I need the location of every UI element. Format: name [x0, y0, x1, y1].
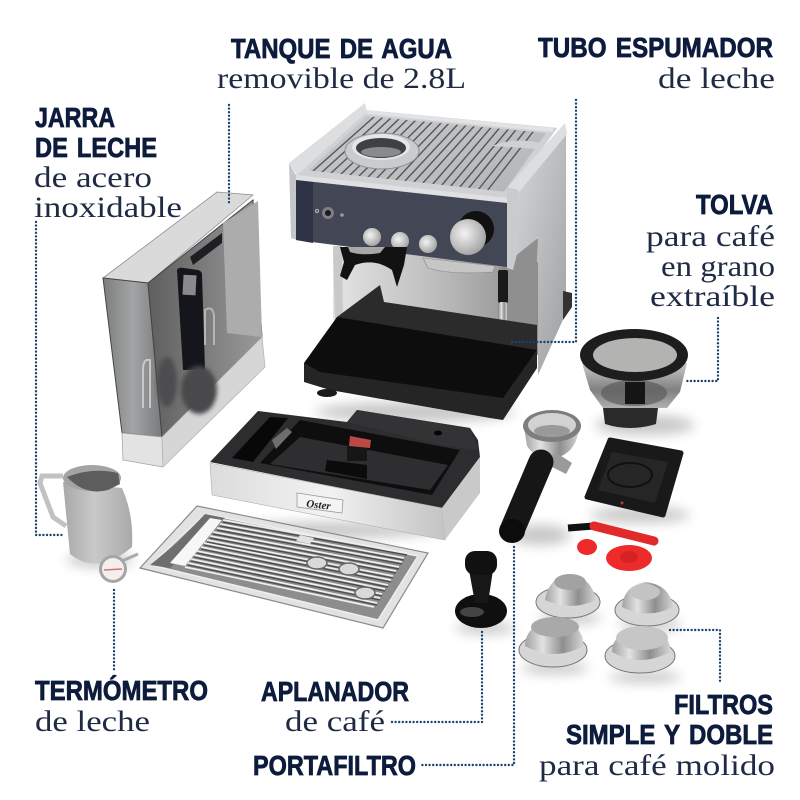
knobs: [363, 211, 494, 255]
label: termómetro: [35, 675, 208, 738]
label: jarra de leche: DE LECHE: [35, 132, 157, 163]
label: jarra de leche: [34, 102, 182, 224]
interior back wall: [333, 247, 538, 355]
drip box base: [210, 410, 480, 540]
bean hopper ring: [345, 133, 419, 169]
brand plate: Oster: [306, 498, 332, 513]
label: aplanador: APLANADOR: [261, 676, 409, 707]
label: aplanador: [261, 676, 409, 738]
label: jarra de leche: JARRA: [35, 102, 115, 133]
red discs: [577, 539, 652, 571]
hopper: [580, 329, 688, 428]
drip grate: [140, 506, 428, 628]
label: filtros: para café molido: [539, 749, 775, 782]
tamper: [455, 551, 507, 628]
label: jarra de leche: de acero: [34, 161, 152, 194]
switch: [316, 207, 344, 219]
cleaning brush: [568, 526, 654, 541]
steam wand: [498, 270, 508, 351]
label: tolva: extraíble: [650, 280, 775, 313]
label: tubo espumador: de leche: [658, 62, 775, 95]
label: filtros: [539, 689, 775, 782]
espresso machine: [289, 103, 572, 420]
label: tolva: TOLVA: [696, 189, 773, 220]
rear tab: [563, 291, 572, 320]
thermometer: [99, 554, 138, 583]
portafilter: [499, 410, 581, 543]
label: tolva: en grano: [661, 250, 775, 283]
label: filtros: FILTROS: [674, 689, 773, 720]
label: portafiltro: PORTAFILTRO: [253, 750, 416, 781]
label: jarra de leche: inoxidable: [34, 191, 182, 224]
red latch and holder: [325, 436, 371, 479]
tank handle and internal parts: [143, 233, 222, 414]
machine top tray: [295, 110, 557, 198]
label: tanque de agua: removible de 2.8L: [217, 62, 466, 95]
water tank: [103, 192, 265, 467]
label: tanque de agua: [217, 33, 466, 95]
drip tray: [304, 285, 537, 420]
label: termómetro: de leche: [35, 705, 150, 738]
shadows: soft contact shadows: [66, 402, 695, 683]
front post right: [507, 187, 518, 270]
label: tolva: para café: [646, 220, 775, 253]
connector lines: dotted leaders: [36, 100, 720, 765]
label: termómetro: TERMÓMETRO: [35, 675, 208, 706]
milk pitcher: [40, 465, 132, 563]
front post left: [289, 163, 297, 240]
label: tubo espumador: [538, 32, 775, 95]
label: tolva: [646, 189, 775, 313]
group head and bracket: [340, 247, 495, 287]
label: aplanador: de café: [285, 705, 385, 738]
machine body: side panel: [513, 133, 566, 375]
tamping mat: [587, 440, 681, 515]
side rails: [289, 103, 567, 192]
brand plate: [297, 493, 343, 513]
control panel: [296, 178, 507, 267]
label: tanque de agua: TANQUE DE AGUA: [231, 33, 452, 64]
filter baskets: [519, 574, 679, 673]
